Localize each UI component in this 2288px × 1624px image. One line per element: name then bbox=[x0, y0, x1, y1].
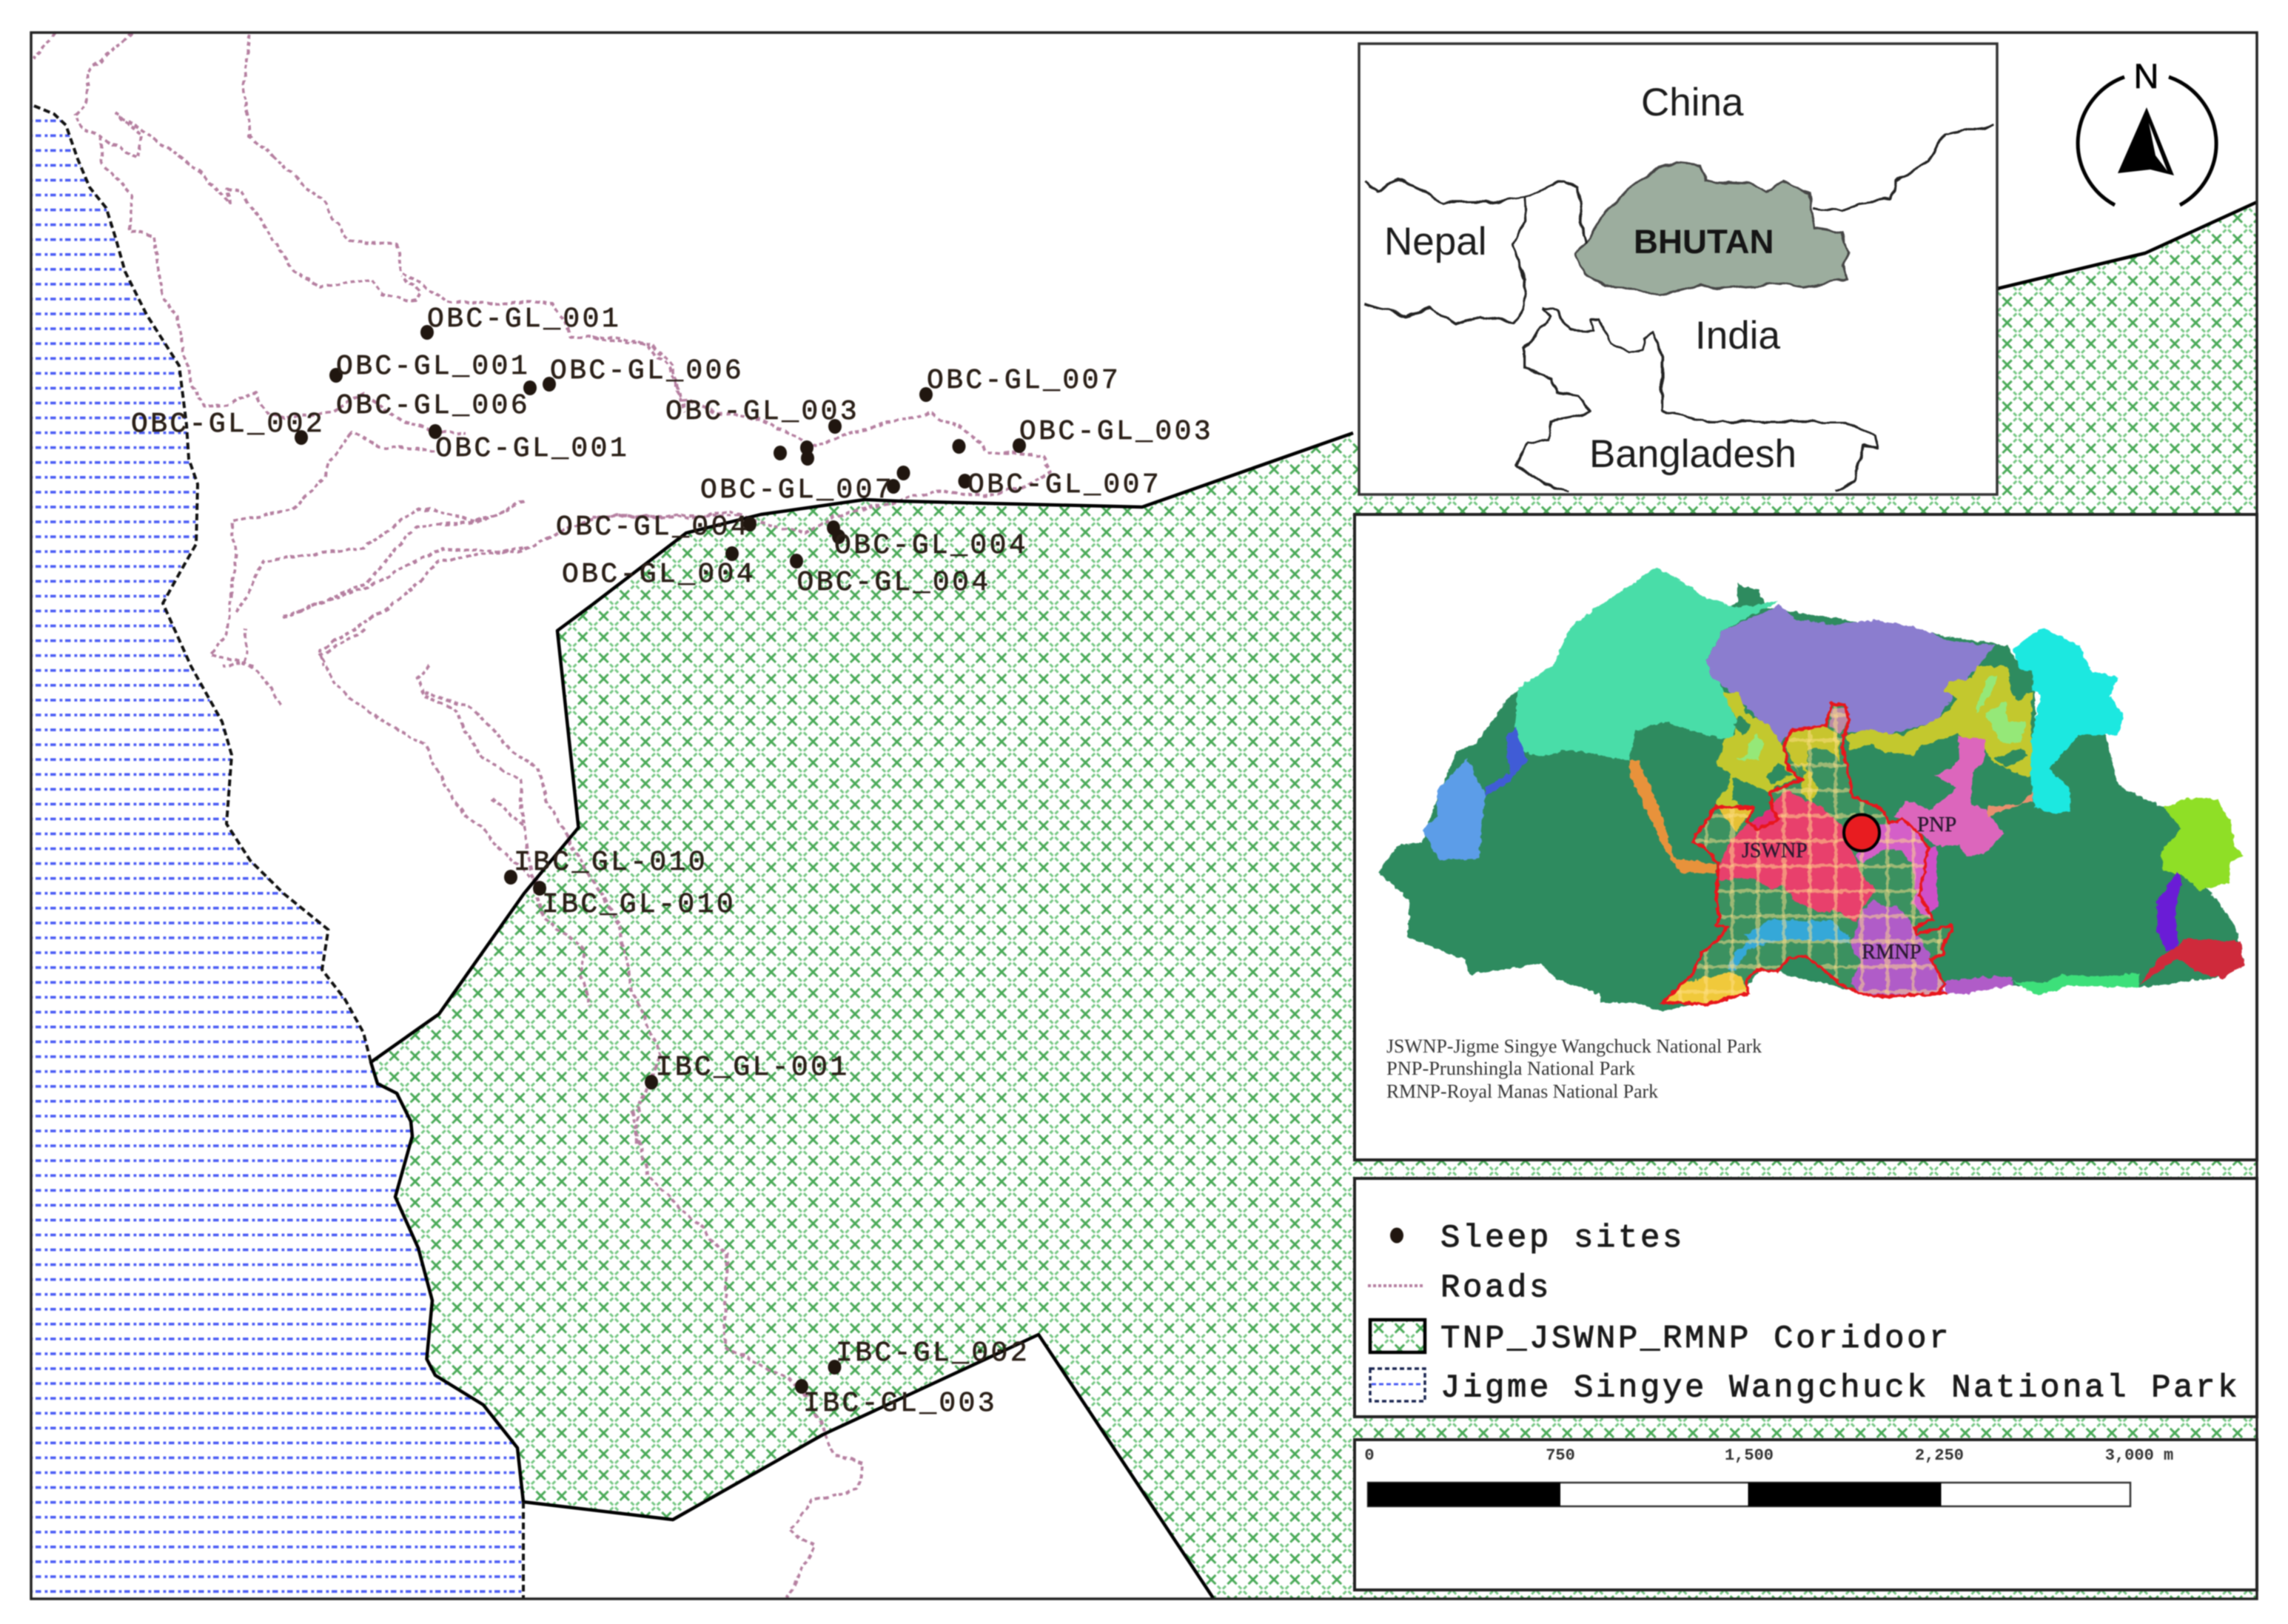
sleep site labels: OBC-GL_001 bbox=[336, 351, 530, 383]
sleep site labels: IBC_GL-001 bbox=[656, 1052, 850, 1084]
panel: regional location map: Bangladesh bbox=[1589, 432, 1796, 476]
corridor area: TNP JSWNP RMNP corridor bbox=[371, 202, 2257, 1599]
sleep site labels: OBC-GL_004 bbox=[556, 511, 750, 543]
coloured park map bbox=[1378, 567, 2244, 1011]
park name labels bbox=[1742, 813, 1956, 964]
central parks detail bbox=[1663, 666, 2033, 1004]
sleep site labels: IBC-GL_002 bbox=[836, 1338, 1030, 1369]
sleep site labels: OBC-GL_001 bbox=[435, 433, 629, 465]
legend: sleep sites: Sleep sites bbox=[1440, 1220, 1685, 1257]
panel: regional location map: India bbox=[1695, 314, 1780, 358]
corridor boundary bbox=[371, 202, 2257, 1598]
legend: corridor: TNP_JSWNP_RMNP Coridoor bbox=[1440, 1321, 1951, 1358]
roads bbox=[33, 33, 1050, 1598]
sleep site labels: OBC-GL_002 bbox=[131, 409, 325, 440]
park name labels: PNP bbox=[1917, 813, 1956, 836]
icon: north arrow: N bbox=[2134, 56, 2158, 95]
national park dashed boundary bbox=[34, 106, 523, 1598]
sleep site markers bbox=[295, 325, 1026, 1394]
park abbreviations key: PNP-Prunshingla National Park bbox=[1386, 1058, 1635, 1079]
sleep site labels: OBC-GL_006 bbox=[336, 390, 530, 422]
icon: north arrow bbox=[2078, 56, 2216, 205]
panel: regional location map bbox=[1359, 44, 1997, 494]
scale bar labels bbox=[1364, 1446, 2173, 1465]
sleep site labels: OBC-GL_007 bbox=[927, 365, 1121, 397]
scale bar labels: 3,000 m bbox=[2105, 1446, 2173, 1465]
sleep site labels: OBC-GL_004 bbox=[562, 559, 756, 591]
scale bar labels: 750 bbox=[1546, 1446, 1575, 1465]
sleep site labels: OBC-GL_001 bbox=[427, 303, 621, 335]
panel: regional location map: Nepal bbox=[1384, 220, 1486, 264]
corridor overlay with red outline bbox=[1663, 703, 1952, 1004]
park abbreviations key: JSWNP-Jigme Singye Wangchuck National Park bbox=[1386, 1036, 1762, 1057]
Bhutan shape bbox=[1575, 163, 1848, 295]
scale bar labels: 0 bbox=[1364, 1446, 1375, 1465]
legend: national park: Jigme Singye Wangchuck National Park bbox=[1440, 1370, 2240, 1407]
sleep site labels: OBC-GL_003 bbox=[1019, 416, 1213, 448]
sleep site labels: OBC-GL_003 bbox=[665, 396, 859, 428]
panel: protected areas of Bhutan bbox=[1355, 514, 2257, 1160]
park name labels: JSWNP bbox=[1742, 839, 1808, 862]
sleep site labels: IBC-GL_003 bbox=[803, 1388, 997, 1420]
sleep site labels: IBC_GL-010 bbox=[542, 889, 736, 921]
sleep site labels: OBC-GL_007 bbox=[700, 474, 894, 506]
panel: scale bar bbox=[1355, 1440, 2257, 1590]
scale bar segments bbox=[1368, 1483, 2130, 1506]
park abbreviations key bbox=[1386, 1036, 1762, 1102]
sleep site labels: IBC_GL-010 bbox=[514, 847, 708, 879]
park name labels: RMNP bbox=[1862, 941, 1922, 964]
park abbreviations key: RMNP-Royal Manas National Park bbox=[1386, 1081, 1658, 1102]
panel: regional location map: BHUTAN bbox=[1634, 223, 1774, 261]
sleep site labels: OBC-GL_007 bbox=[967, 469, 1161, 501]
sleep site labels: OBC-GL_004 bbox=[834, 530, 1028, 562]
scale bar labels: 1,500 bbox=[1725, 1446, 1774, 1465]
red location marker bbox=[1844, 814, 1879, 851]
Jigme Singye Wangchuck National Park area bbox=[33, 106, 523, 1598]
sleep site labels: OBC-GL_006 bbox=[550, 355, 744, 387]
scale bar labels: 2,250 bbox=[1915, 1446, 1964, 1465]
panel: legend bbox=[1355, 1178, 2257, 1417]
sleep site labels: OBC-GL_004 bbox=[796, 567, 991, 599]
legend: roads: Roads bbox=[1440, 1270, 1551, 1307]
sleep site labels bbox=[131, 303, 1213, 1420]
panel: regional location map: China bbox=[1641, 81, 1744, 124]
